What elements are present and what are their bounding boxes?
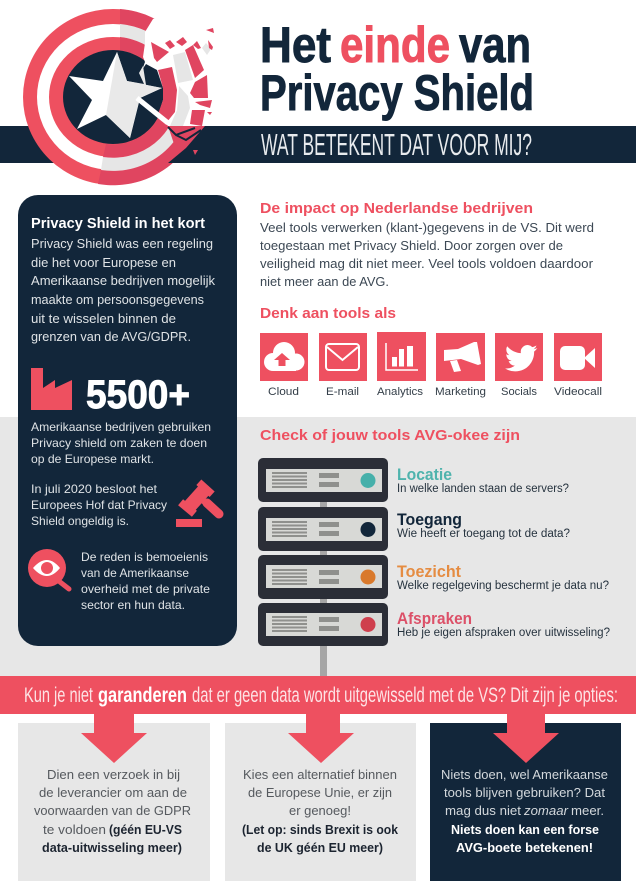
arrow 1: [81, 713, 147, 763]
icon: marketing: Marketing: [435, 386, 486, 398]
intro text: maakte om persoonsgegevens: [31, 292, 204, 307]
server: Toezicht: Toezicht: [397, 562, 461, 581]
heading: impact: De impact op Nederlandse bedrijven: [260, 200, 533, 217]
option box 3: [430, 723, 621, 881]
icon: socials: Socials: [501, 386, 537, 398]
icon: factory: [31, 368, 72, 410]
icon: e-mail: E-mail: [326, 386, 359, 398]
stat description: Privacy shield om zaken te doen: [31, 436, 207, 450]
option box 2: [225, 723, 416, 881]
option box 2: de Europese Unie, er zijn: [248, 785, 392, 800]
option box 3: Niets doen, wel Amerikaanse: [441, 767, 608, 782]
header band: [0, 126, 636, 163]
option box 2: Kies een alternatief binnen: [243, 767, 397, 782]
server: Toegang: Wie heeft er toegang tot de data?: [397, 528, 570, 540]
impact text: [260, 220, 594, 289]
panel heading: Privacy Shield in het kort: [31, 215, 205, 232]
server: Toegang: [258, 507, 570, 551]
server: Afspraken: Heb je eigen afspraken over uitwisseling?: [397, 627, 610, 639]
option box 3: meer.: [571, 803, 604, 818]
intro text: grenzen van de AVG/GDPR.: [31, 329, 191, 344]
option box 3: Niets doen kan een forse: [451, 822, 599, 837]
server: Locatie: Locatie: [397, 465, 452, 484]
server pole: [320, 500, 327, 677]
panel: Privacy Shield in het kort: [18, 195, 237, 646]
stat: 5500+: 5500+: [86, 373, 190, 417]
reason text: De reden is bemoeienis: [81, 550, 208, 564]
icon: cracked shield: [23, 5, 215, 185]
title: einde: [340, 17, 450, 73]
intro text: die het voor Europese en: [31, 255, 176, 270]
option box 1: (géén EU-VS: [109, 822, 182, 837]
intro text: [31, 236, 215, 344]
intro text: uit te wisselen binnen de: [31, 311, 176, 326]
arrow 3: [493, 713, 559, 763]
option box 1: [18, 723, 210, 881]
icon: cloud: [260, 333, 308, 398]
banner: [0, 676, 636, 714]
reason text: [81, 550, 210, 612]
arrow 2: [288, 713, 354, 763]
server: Locatie: [258, 458, 569, 502]
banner text: Kun je niet: [24, 684, 93, 707]
court decision text: [31, 482, 167, 528]
intro text: Privacy Shield was een regeling: [31, 236, 213, 251]
banner text: [24, 684, 618, 707]
icon: gavel: [176, 486, 219, 527]
court decision text: Europees Hof dat Privacy: [31, 498, 167, 512]
server: Toegang: Toegang: [397, 510, 462, 529]
server: Locatie: In welke landen staan de servers?: [397, 483, 569, 495]
server: Afspraken: [258, 603, 610, 646]
heading: check tools: Check of jouw tools AVG-okee zijn: [260, 427, 520, 444]
server: Afspraken: Afspraken: [397, 609, 472, 628]
server: Toezicht: [258, 555, 609, 599]
option box 1: voorwaarden van de GDPR: [34, 803, 191, 818]
icon: analytics: Analytics: [377, 386, 424, 398]
heading: tools: Denk aan tools als: [260, 305, 396, 322]
option box 1: data-uitwisseling meer): [42, 840, 182, 855]
icon: magnifier with eye: [28, 549, 69, 589]
impact text: Veel tools verwerken (klant-)gegevens in de VS. Dit werd: [260, 220, 594, 235]
impact text: veiligheid mag dit niet meer. Veel tools voldoen daardoor: [260, 256, 594, 271]
court decision text: Shield ongeldig is.: [31, 514, 129, 528]
option box 1: Dien een verzoek in bij: [47, 767, 180, 782]
icon: videocall: [554, 333, 602, 398]
banner text: garanderen: [98, 684, 187, 707]
option box 1: de leverancier om aan de: [39, 785, 187, 800]
option box 3: tools blijven gebruiken? Dat: [444, 785, 605, 800]
impact text: toegestaan met Privacy Shield. Door zorgen over de: [260, 238, 563, 253]
option box 1: te voldoen: [43, 822, 106, 837]
title: Het: [260, 17, 331, 73]
option box 2: de UK géén EU meer): [257, 840, 383, 855]
icon: analytics: [377, 332, 426, 398]
stat description: Amerikaanse bedrijven gebruiken: [31, 420, 211, 434]
reason text: overheid met de private: [81, 582, 210, 596]
title: Privacy Shield: [260, 65, 534, 121]
impact text: niet meer aan de AVG.: [260, 274, 389, 289]
option box 3: AVG-boete betekenen!: [456, 840, 593, 855]
stat description: op de Europese markt.: [31, 452, 154, 466]
icon: e-mail: [319, 333, 367, 398]
option box 3: zomaar: [523, 803, 569, 818]
reason text: sector en hun data.: [81, 598, 185, 612]
icon: videocall: Videocall: [554, 386, 602, 398]
option box 2: (Let op: sinds Brexit is ook: [242, 822, 399, 837]
server: Toezicht: Welke regelgeving beschermt je data nu?: [397, 580, 609, 592]
court decision text: In juli 2020 besloot het: [31, 482, 158, 496]
title: van: [459, 17, 531, 73]
title: [260, 17, 534, 121]
icon: socials: [495, 333, 543, 398]
intro text: Amerikaanse bedrijven mogelijk: [31, 273, 215, 288]
reason text: van de Amerikaanse: [81, 566, 189, 580]
option box 3: mag dus niet: [445, 803, 521, 818]
icon: cloud: Cloud: [268, 386, 299, 398]
option box 2: er genoeg!: [289, 803, 351, 818]
icon: marketing: [435, 333, 486, 398]
stat description: [31, 420, 211, 466]
